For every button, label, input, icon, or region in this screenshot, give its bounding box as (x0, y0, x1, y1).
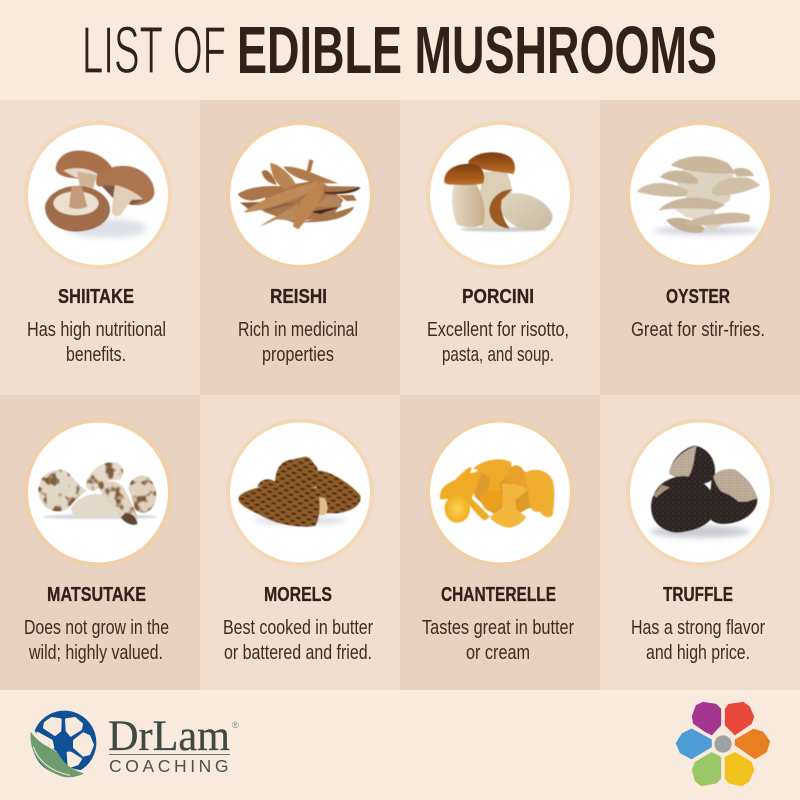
icon: reishi photo (226, 121, 374, 269)
logo: DrLam Coaching (30, 711, 239, 779)
panel: morels (200, 395, 400, 690)
description: chanterelle: Tastes great in butter (422, 616, 574, 639)
icon: colourful flower emblem (677, 703, 769, 785)
description: truffle (631, 616, 765, 664)
name: morels: MORELS (264, 583, 332, 606)
title (82, 13, 717, 88)
description: matsutake: Does not grow in the (24, 616, 169, 639)
description: shiitake (27, 318, 166, 366)
description: shiitake: benefits. (66, 343, 126, 366)
description: matsutake (24, 616, 169, 664)
description: chanterelle: or cream (466, 641, 530, 664)
description: porcini: pasta, and soup. (442, 343, 554, 366)
name: truffle: TRUFFLE (663, 583, 733, 606)
registered mark: ® (232, 720, 239, 730)
description: reishi: Rich in medicinal (238, 318, 358, 341)
description: porcini: Excellent for risotto, (427, 318, 569, 341)
name: chanterelle: CHANTERELLE (441, 583, 556, 606)
panel: porcini (400, 100, 600, 395)
description: matsutake: wild; highly valued. (28, 641, 163, 664)
icon: porcini photo (426, 121, 574, 269)
name: porcini: PORCINI (462, 285, 534, 308)
panel: reishi (200, 100, 400, 395)
icon: oyster photo (626, 121, 774, 269)
panel: shiitake (0, 100, 200, 395)
description: reishi (238, 318, 358, 366)
description: morels: or battered and fried. (224, 641, 372, 664)
description: reishi: properties (262, 343, 334, 366)
panel: truffle (600, 395, 800, 690)
description: shiitake: Has high nutritional (27, 318, 166, 341)
panel: chanterelle (400, 395, 600, 690)
panel: oyster (600, 100, 800, 395)
description: porcini (427, 318, 569, 366)
name: reishi: REISHI (270, 285, 327, 308)
name: shiitake: SHIITAKE (58, 285, 134, 308)
description: truffle: Has a strong flavor (631, 616, 765, 639)
wordmark: DrLam: DrLam (108, 713, 230, 760)
name: oyster: OYSTER (666, 285, 730, 308)
icon: DrLam flower emblem (30, 711, 96, 779)
icon: matsutake photo (24, 418, 172, 566)
description: chanterelle (422, 616, 574, 664)
description: morels: Best cooked in butter (223, 616, 373, 639)
title: LIST OF (82, 13, 226, 88)
wordmark: COACHING: COACHING (109, 756, 232, 776)
description: truffle: and high price. (646, 641, 750, 664)
icon: chanterelle photo (426, 418, 574, 566)
description: morels (223, 616, 373, 664)
footer band (0, 690, 800, 800)
icon: shiitake photo (24, 121, 172, 269)
description: oyster: Great for stir-fries. (631, 318, 765, 341)
name: matsutake: MATSUTAKE (47, 583, 146, 606)
icon: morels photo (226, 418, 374, 566)
panel: matsutake (0, 395, 200, 690)
icon: truffle photo (626, 418, 774, 566)
